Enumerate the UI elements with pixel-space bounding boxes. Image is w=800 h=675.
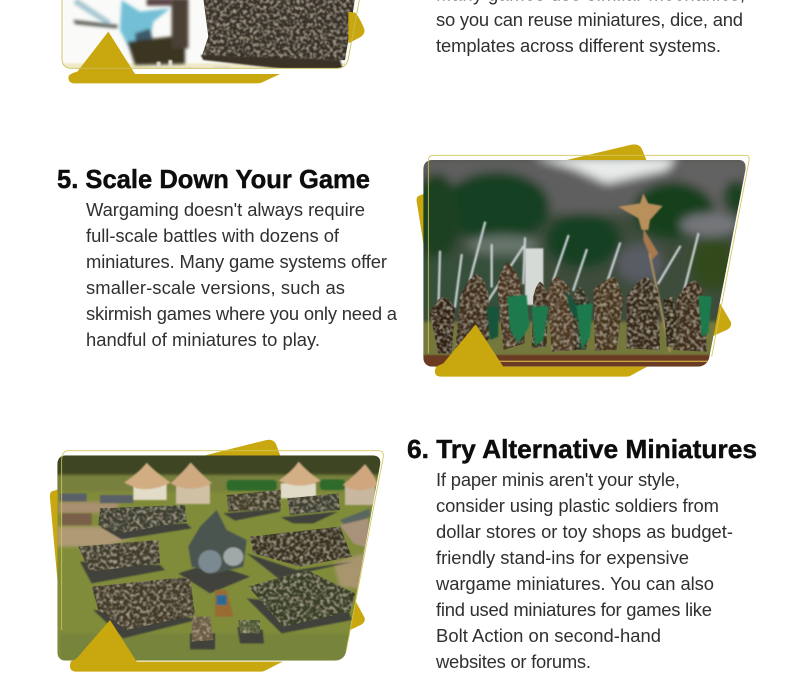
heading: tip 6: 6. Try Alternative Miniatures [407, 434, 757, 464]
body text: tip 5: skirmish games where you only need a [86, 303, 398, 324]
spears [436, 220, 700, 309]
panel: tip 4 text: so you can reuse miniatures, dice, and [436, 9, 743, 30]
body text: tip 6: find used miniatures for games like [436, 599, 712, 620]
body text: tip 6: friendly stand-ins for expensive [436, 547, 689, 568]
body text: tip 5: handful of miniatures to play. [86, 329, 320, 350]
body text: tip 6 [435, 469, 733, 672]
photo: miniatures on white [63, 0, 355, 68]
huts [124, 462, 378, 505]
body text: tip 6: websites or forums. [435, 651, 591, 672]
panel: tip 5 text [57, 164, 398, 350]
photo: army on grass table [53, 453, 387, 667]
thin outline frame [428, 155, 749, 357]
soldiers [430, 262, 707, 353]
thin outline frame [62, 0, 360, 68]
body text: tip 6: consider using plastic soldiers from [436, 495, 719, 516]
body text: tip 5: Wargaming doesn't always require [86, 199, 365, 220]
panel: tip 4 text [436, 0, 745, 56]
central monster [188, 510, 247, 617]
body text: tip 5: miniatures. Many game systems offer [86, 251, 387, 272]
body text: tip 5: smaller-scale versions, such as [86, 277, 345, 298]
body text: tip 6: If paper minis aren't your style, [436, 469, 680, 490]
green shields [487, 288, 712, 350]
body text: tip 6: Bolt Action on second-hand [436, 625, 661, 646]
panel: tip 6 image [50, 440, 387, 672]
yellow accent: triangle and bar [70, 620, 283, 672]
yellow accent shapes behind [50, 440, 365, 632]
body text: tip 5: full-scale battles with dozens of [86, 225, 340, 246]
body text: tip 6: wargame miniatures. You can also [435, 573, 714, 594]
army units [80, 508, 353, 649]
panel: tip 4 image [60, 0, 364, 83]
thin outline frame [62, 451, 383, 652]
yellow accent: triangle and bar [435, 324, 647, 377]
photo: elven spearmen [413, 157, 753, 370]
heading: tip 5: 5. Scale Down Your Game [57, 164, 370, 194]
body text: tip 5 [86, 199, 398, 350]
banner and tower [525, 193, 670, 352]
body text: tip 6: dollar stores or toy shops as budget- [436, 521, 733, 542]
yellow accent shapes behind [417, 144, 731, 337]
yellow accent shapes [68, 12, 364, 83]
panel: tip 4 text: templates across different systems. [436, 35, 721, 56]
panel: tip 6 text [407, 434, 757, 672]
panel: tip 5 image [413, 144, 753, 377]
